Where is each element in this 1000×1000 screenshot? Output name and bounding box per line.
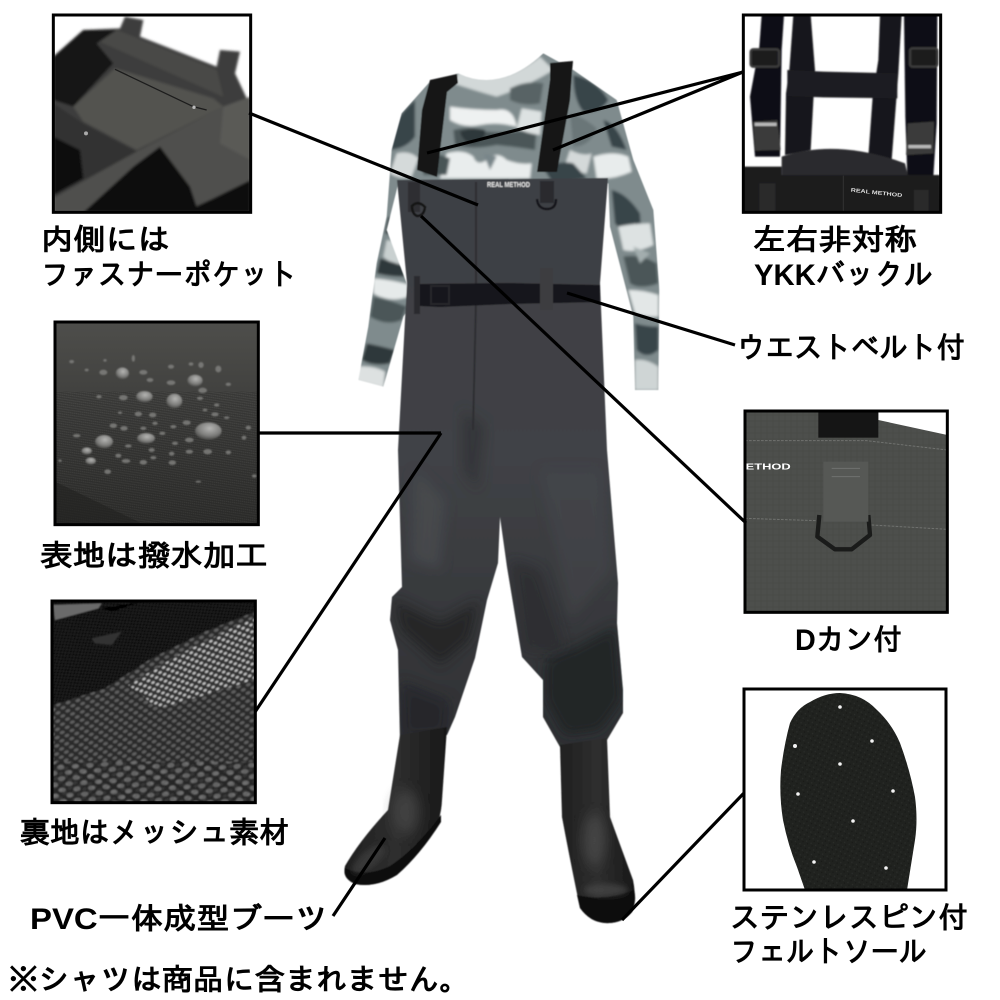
left D-ring — [408, 182, 425, 216]
label: waist belt: ウエストベルト付 — [737, 332, 965, 365]
label: YKK buckle — [753, 224, 933, 292]
arrow: boots leader — [333, 838, 385, 916]
arrow: mesh leader — [255, 433, 441, 712]
arrow: buckle leaders — [427, 72, 743, 153]
right boot — [560, 738, 635, 923]
arrow: pocket leader — [249, 113, 478, 205]
camouflage shirt — [353, 50, 663, 397]
arrow: water repellent leader — [258, 431, 441, 435]
figure: wader on mannequin — [344, 50, 663, 923]
bib logo: REAL METHOD — [487, 182, 530, 189]
left boot — [344, 727, 447, 885]
trousers and bib — [390, 178, 623, 747]
label: mesh lining: 裏地はメッシュ素材 — [20, 817, 289, 850]
panel: asymmetrical YKK buckle photo: REAL METHOD — [850, 188, 903, 199]
stainless pins — [793, 705, 895, 870]
trouser folds — [392, 182, 622, 738]
label: felt sole: ステンレスピン付 — [730, 902, 968, 935]
waist belt — [414, 268, 600, 314]
label: D-ring: Dカン付 — [795, 624, 902, 657]
right D-ring — [537, 181, 556, 209]
water droplets — [58, 355, 257, 483]
label: inner pocket: 内側には — [41, 224, 170, 257]
label: YKK buckle: 左右非対称 — [753, 224, 917, 257]
label: inner pocket — [41, 224, 297, 292]
label: YKK buckle: YKKバックル — [754, 259, 933, 292]
label: felt sole: フェルトソール — [730, 936, 927, 969]
panel: asymmetrical YKK buckle photo — [743, 15, 941, 212]
arrow: sole leader — [622, 793, 744, 920]
panel: felt sole with stainless pins photo — [744, 689, 946, 890]
panel: D-ring close-up photo — [745, 411, 947, 612]
label: PVC boots: PVC一体成型ブーツ — [30, 902, 328, 936]
label: water repellent: 表地は撥水加工 — [40, 540, 268, 573]
right suspender strap — [537, 61, 573, 172]
left suspender strap — [417, 74, 458, 177]
panel: mesh lining photo — [48, 598, 258, 805]
panel: inner zip pocket photo — [53, 15, 251, 212]
label: felt sole — [730, 902, 968, 969]
arrow: waist belt leader — [567, 293, 735, 345]
panel: D-ring close-up photo: ETHOD — [746, 462, 791, 472]
label: inner pocket: ファスナーポケット — [41, 259, 297, 292]
panel: water repellent fabric photo — [55, 322, 258, 525]
footnote: ※シャツは商品に含まれません。 — [8, 964, 470, 997]
arrow: D-ring leader — [421, 216, 746, 523]
felt sole shape — [780, 693, 916, 890]
